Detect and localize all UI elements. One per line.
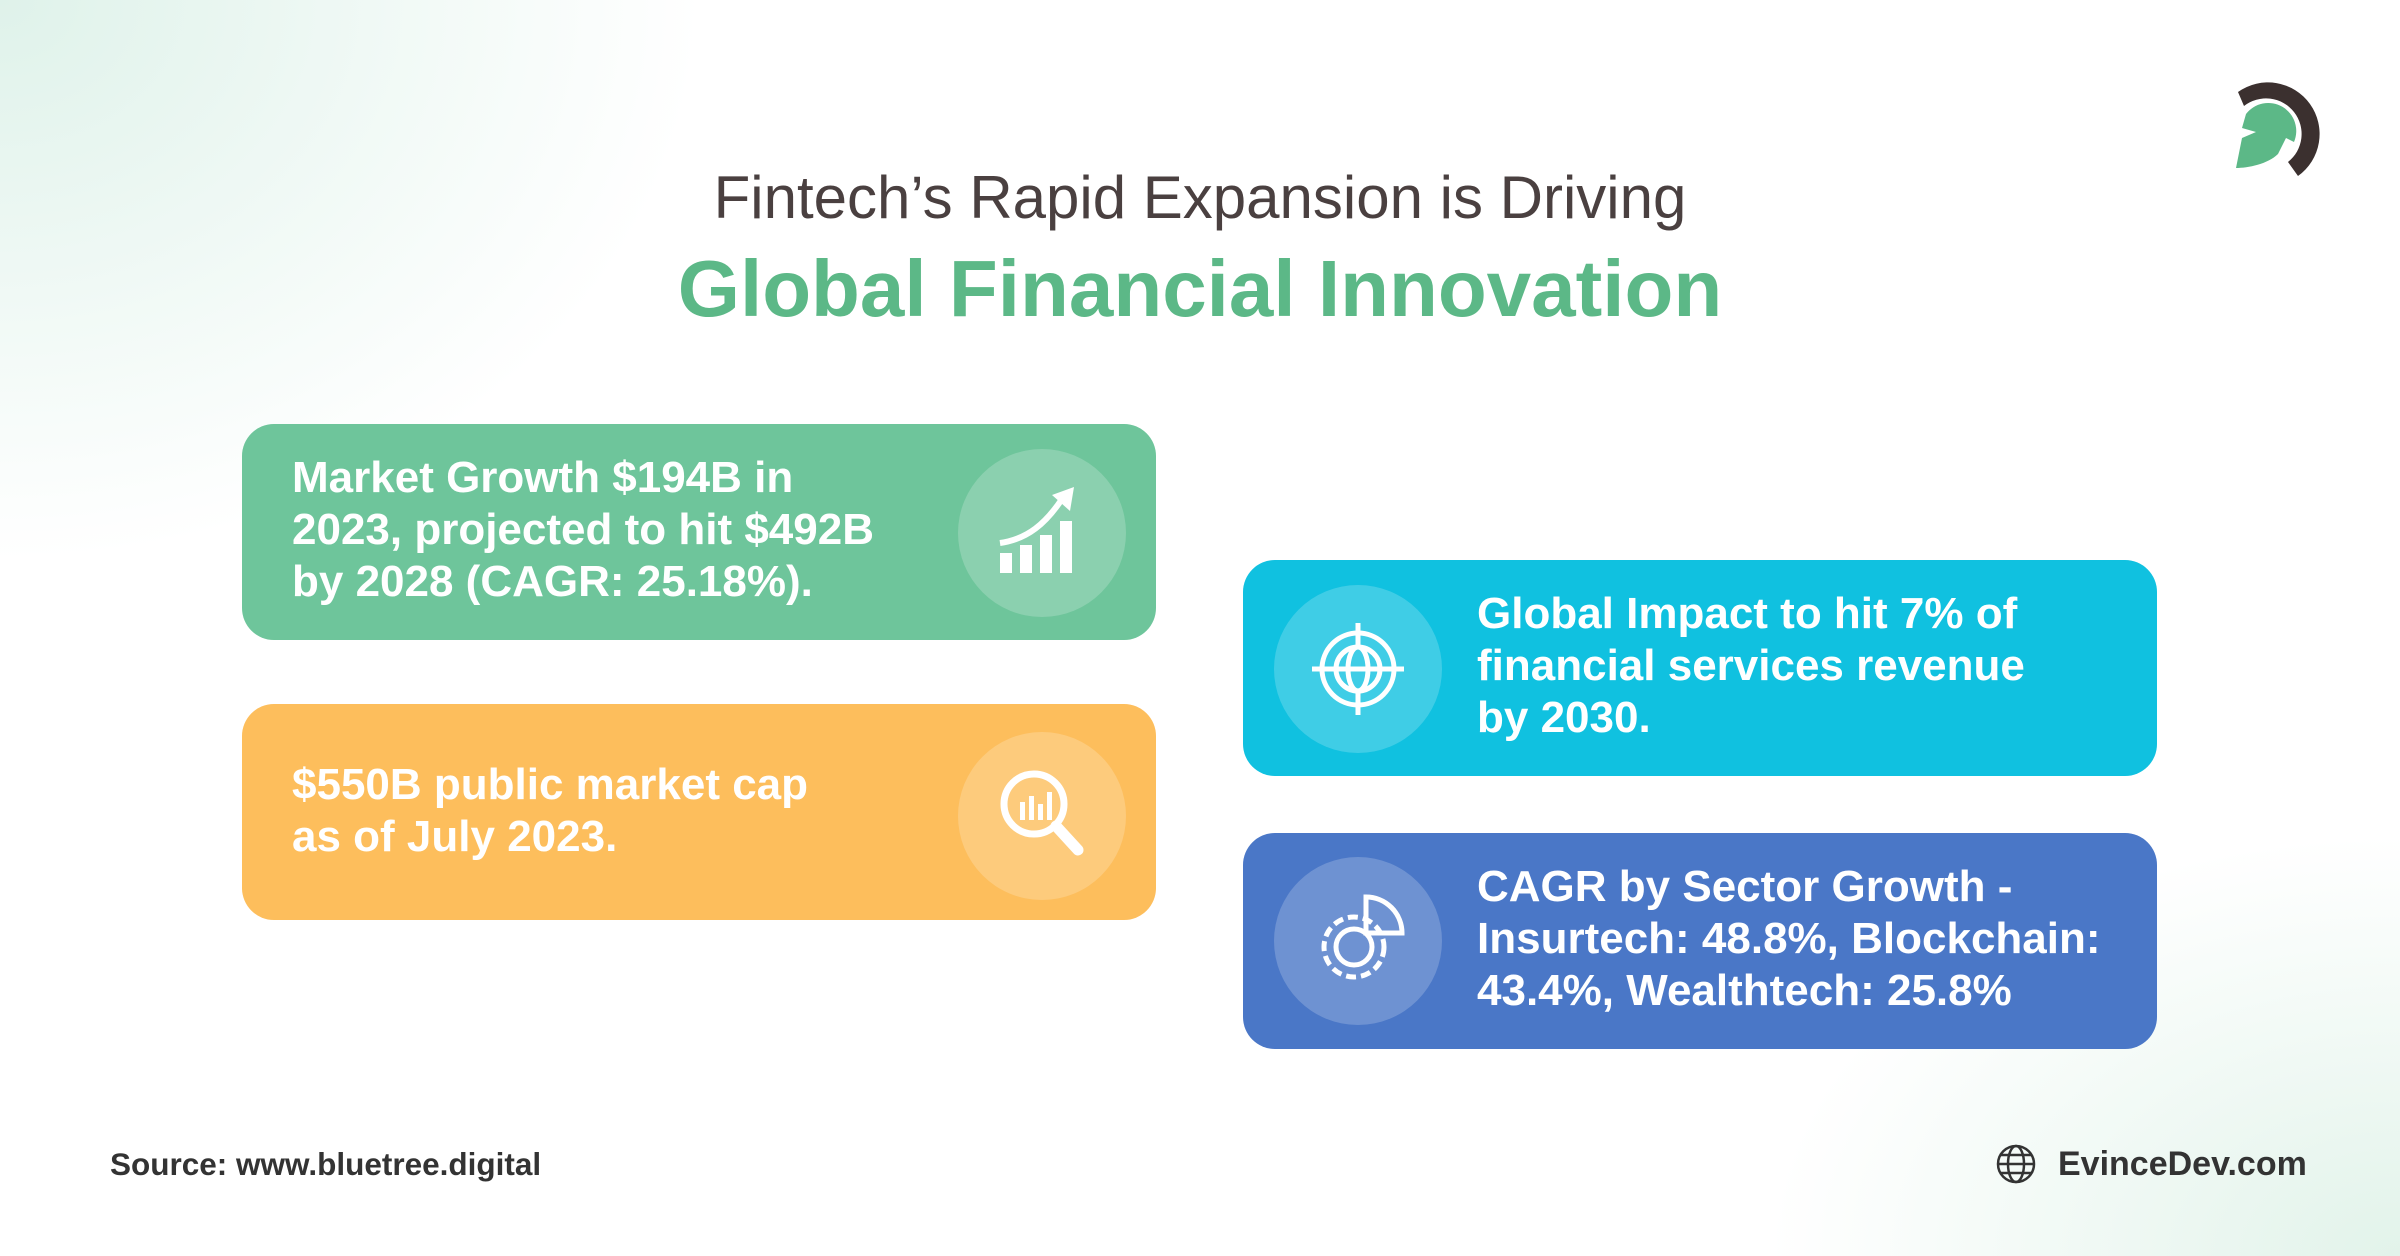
text: global impact [1477,589,2025,742]
source text: Source: www.bluetree.digital [110,1146,541,1182]
text: CAGR by sector: CAGR by Sector Growth - [1477,862,2012,911]
icon: globe [1996,1144,2036,1184]
text: market growth: Market Growth $194B in [292,453,793,502]
logo [2236,82,2320,176]
text: market growth: by 2028 (CAGR: 25.18%). [292,557,813,606]
text: global impact: by 2030. [1477,693,1651,742]
title: Fintech’s Rapid Expansion is Driving [714,164,1686,231]
text: market growth [292,453,874,606]
text: market cap [292,760,808,861]
title: Global Financial Innovation [678,244,1722,333]
panel: global impact [1243,560,2157,776]
text: CAGR by sector [1477,862,2101,1015]
text: CAGR by sector: Insurtech: 48.8%, Blockchain: [1477,914,2101,963]
text: market cap: as of July 2023. [292,812,617,861]
text: market cap: $550B public market cap [292,760,808,809]
text: market growth: 2023, projected to hit $492B [292,505,874,554]
text: global impact: Global Impact to hit 7% of [1477,589,2017,638]
text: CAGR by sector: 43.4%, Wealthtech: 25.8% [1477,966,2012,1015]
panel: CAGR by sector [1243,833,2157,1049]
icon: growth chart [958,449,1126,617]
icon: globe target [1274,585,1442,753]
panel: market cap [242,704,1156,920]
title [678,164,1722,333]
footer: website: EvinceDev.com [2058,1144,2307,1182]
icon: gear pie [1274,857,1442,1025]
text: global impact: financial services revenue [1477,641,2025,690]
icon: magnifier [958,732,1126,900]
panel: market growth [242,424,1156,640]
